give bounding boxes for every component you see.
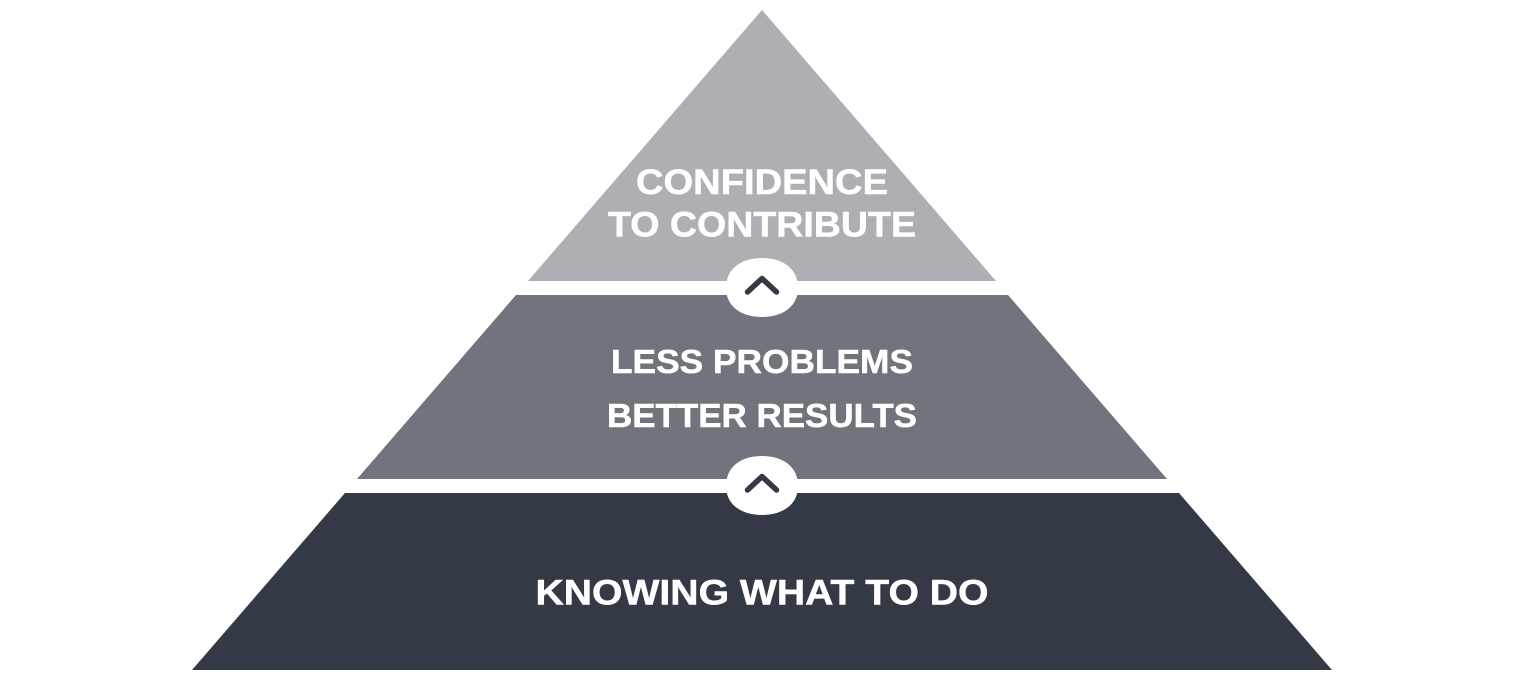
top tier: confidence to contribute <box>528 10 996 281</box>
top tier: confidence to contribute: TO CONTRIBUTE <box>608 206 916 244</box>
top tier: confidence to contribute: CONFIDENCE <box>636 163 888 202</box>
bottom tier: knowing what to do <box>192 493 1332 670</box>
middle tier: less problems, better results <box>357 295 1167 479</box>
middle tier: less problems, better results: BETTER RESULTS <box>607 397 917 434</box>
bottom tier: knowing what to do: KNOWING WHAT TO DO <box>536 574 988 612</box>
middle tier: less problems, better results: LESS PROBLEMS <box>611 343 913 380</box>
lower chevron badge <box>726 456 798 515</box>
upper chevron badge <box>726 258 798 317</box>
